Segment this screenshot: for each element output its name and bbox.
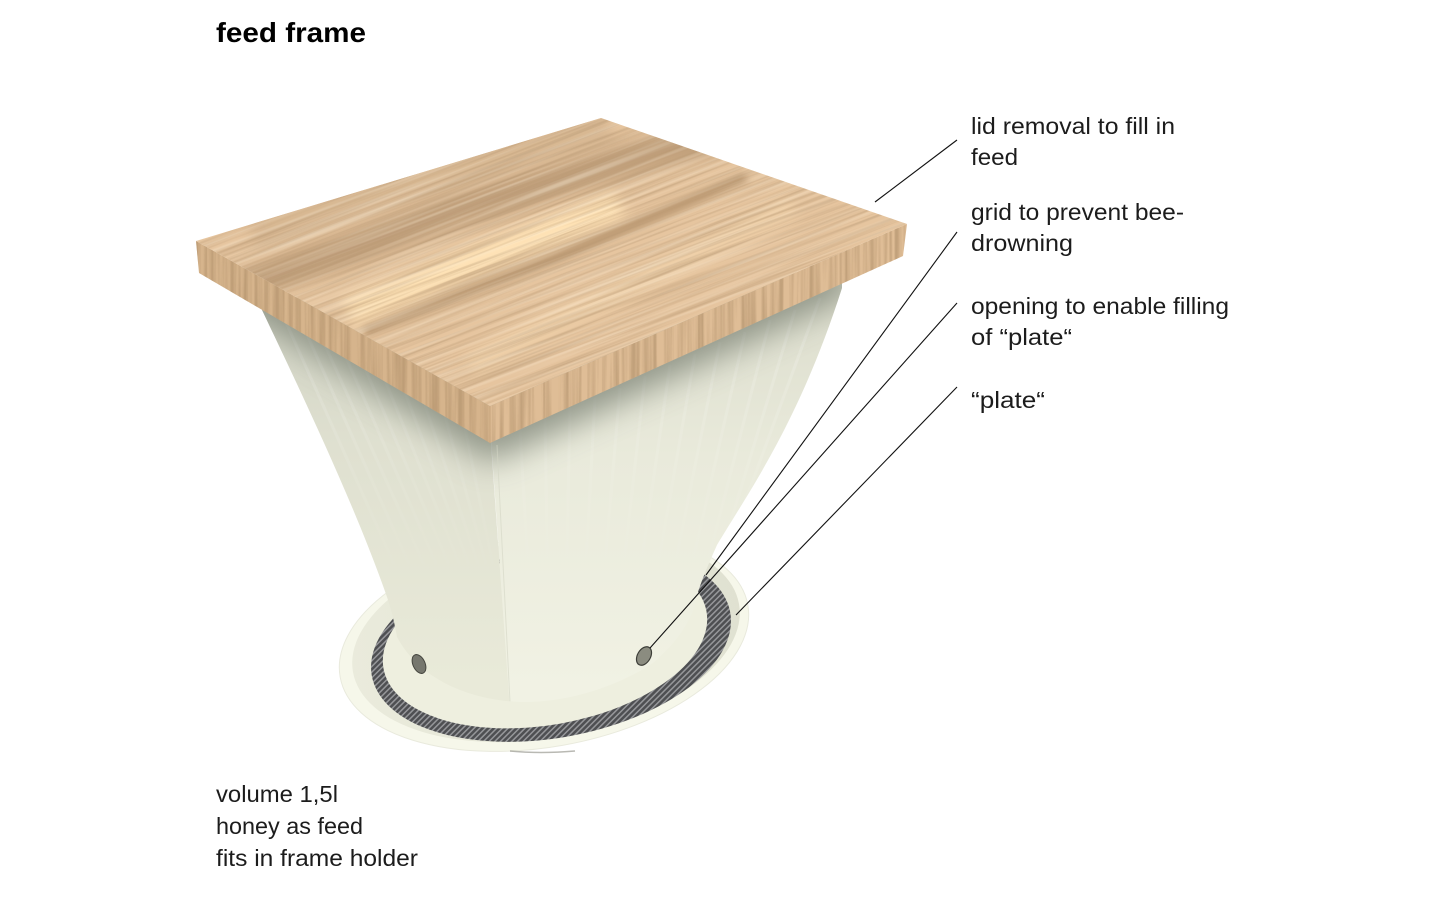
label: lid removal: lid removal to fill in bbox=[971, 113, 1175, 139]
leader line: grid bbox=[706, 232, 957, 575]
label: grid: grid to prevent bee- bbox=[971, 199, 1184, 225]
feed frame product illustration bbox=[196, 118, 907, 754]
label: opening: of “plate“ bbox=[971, 324, 1072, 350]
specs text block: honey as feed bbox=[216, 813, 363, 839]
specs text block: volume 1,5l bbox=[216, 781, 338, 807]
lid side faces bbox=[196, 224, 907, 443]
specs text block: fits in frame holder bbox=[216, 845, 418, 871]
grid ring bbox=[355, 520, 747, 768]
title: feed frame bbox=[216, 17, 366, 48]
leader line: opening bbox=[650, 303, 957, 648]
label: lid removal: feed bbox=[971, 144, 1018, 170]
label: grid: drowning bbox=[971, 230, 1073, 256]
wooden lid bbox=[196, 118, 907, 443]
label: plate: “plate“ bbox=[971, 387, 1045, 413]
left opening bbox=[409, 652, 429, 676]
label: opening: opening to enable filling bbox=[971, 293, 1229, 319]
conical body bbox=[262, 272, 842, 701]
leader line: plate bbox=[736, 387, 957, 615]
right opening bbox=[633, 644, 655, 668]
lid top face bbox=[196, 118, 907, 406]
leader line: lid bbox=[875, 140, 957, 202]
plate bbox=[322, 501, 766, 781]
